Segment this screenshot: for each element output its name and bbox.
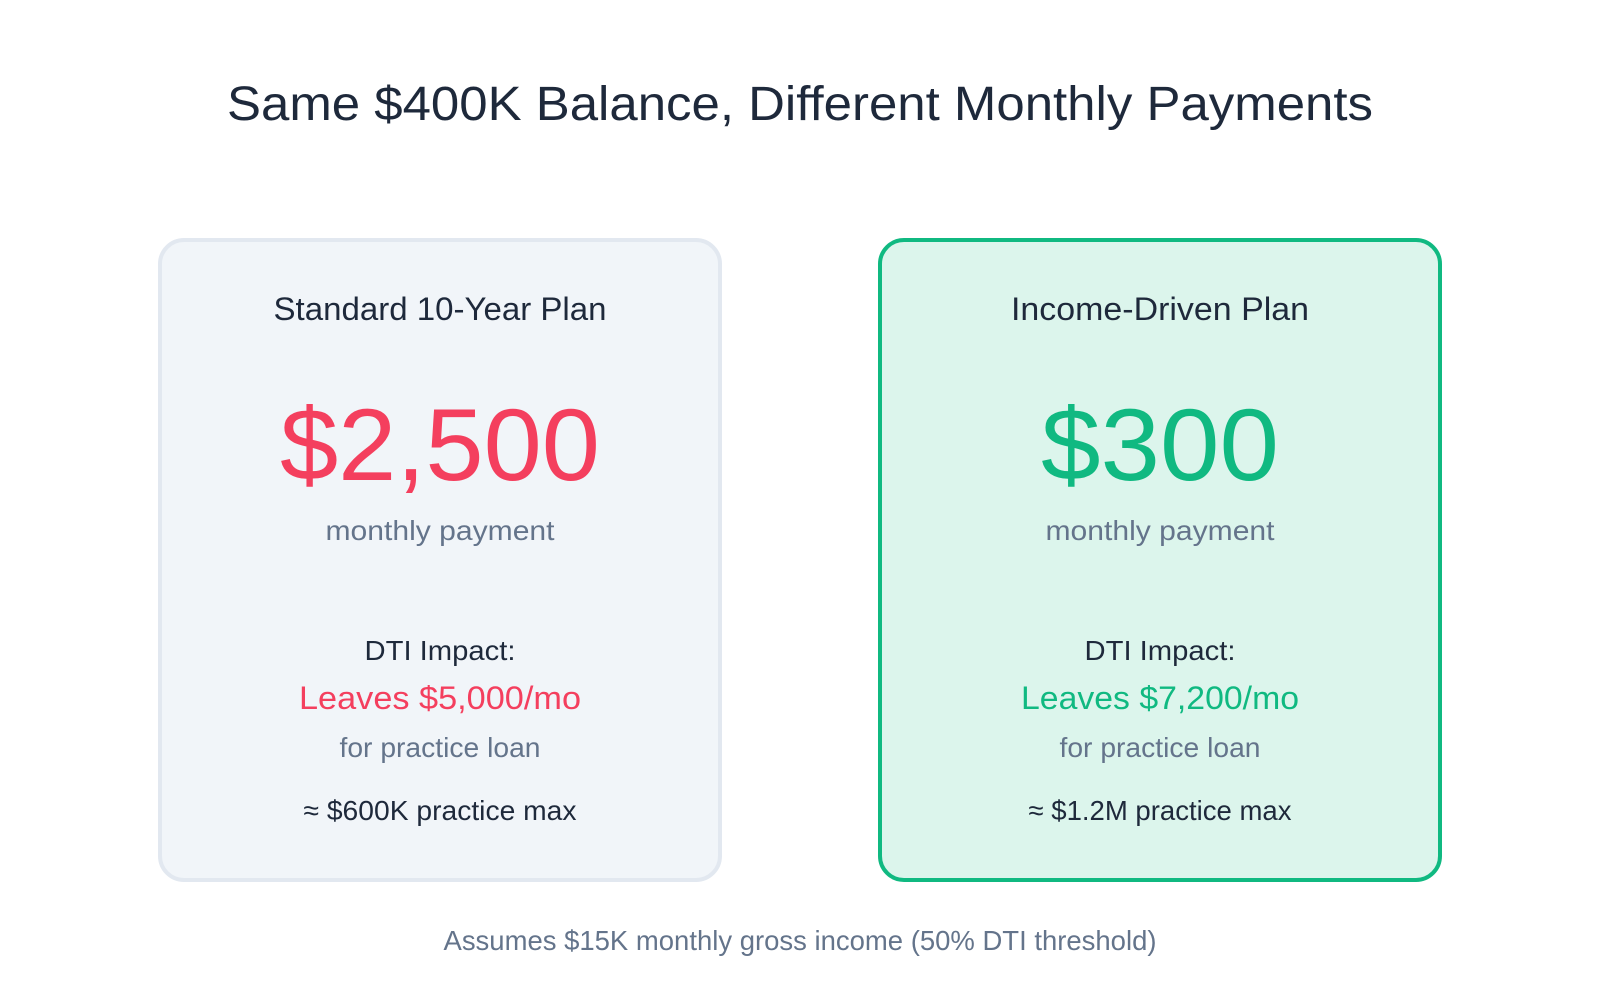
DTI result: standard: Leaves $5,000/mo [299,680,581,716]
payment amount: income-driven: $300 [1041,388,1279,502]
payment amount: standard: $2,500 [280,388,600,502]
DTI caption: standard: for practice loan [340,732,540,763]
panel: standard plan [160,240,720,880]
card background: income-driven plan [880,240,1440,880]
DTI label: standard: DTI Impact: [364,635,516,666]
practice max: standard: ≈ $600K practice max [304,795,576,826]
footnote: Assumes $15K monthly gross income (50% DTI threshold) [444,925,1156,956]
DTI caption: income-driven: for practice loan [1060,732,1260,763]
plan name: standard: Standard 10-Year Plan [274,291,606,327]
DTI result: income-driven: Leaves $7,200/mo [1021,680,1299,716]
title: Same $400K Balance, Different Monthly Payments [227,78,1373,131]
payment caption: income-driven: monthly payment [1046,515,1275,546]
payment caption: standard: monthly payment [326,515,555,546]
practice max: income-driven: ≈ $1.2M practice max [1028,795,1292,826]
plan name: income-driven: Income-Driven Plan [1011,291,1309,327]
DTI label: income-driven: DTI Impact: [1084,635,1236,666]
card background: standard plan [160,240,720,880]
panel: income-driven plan [880,240,1440,880]
